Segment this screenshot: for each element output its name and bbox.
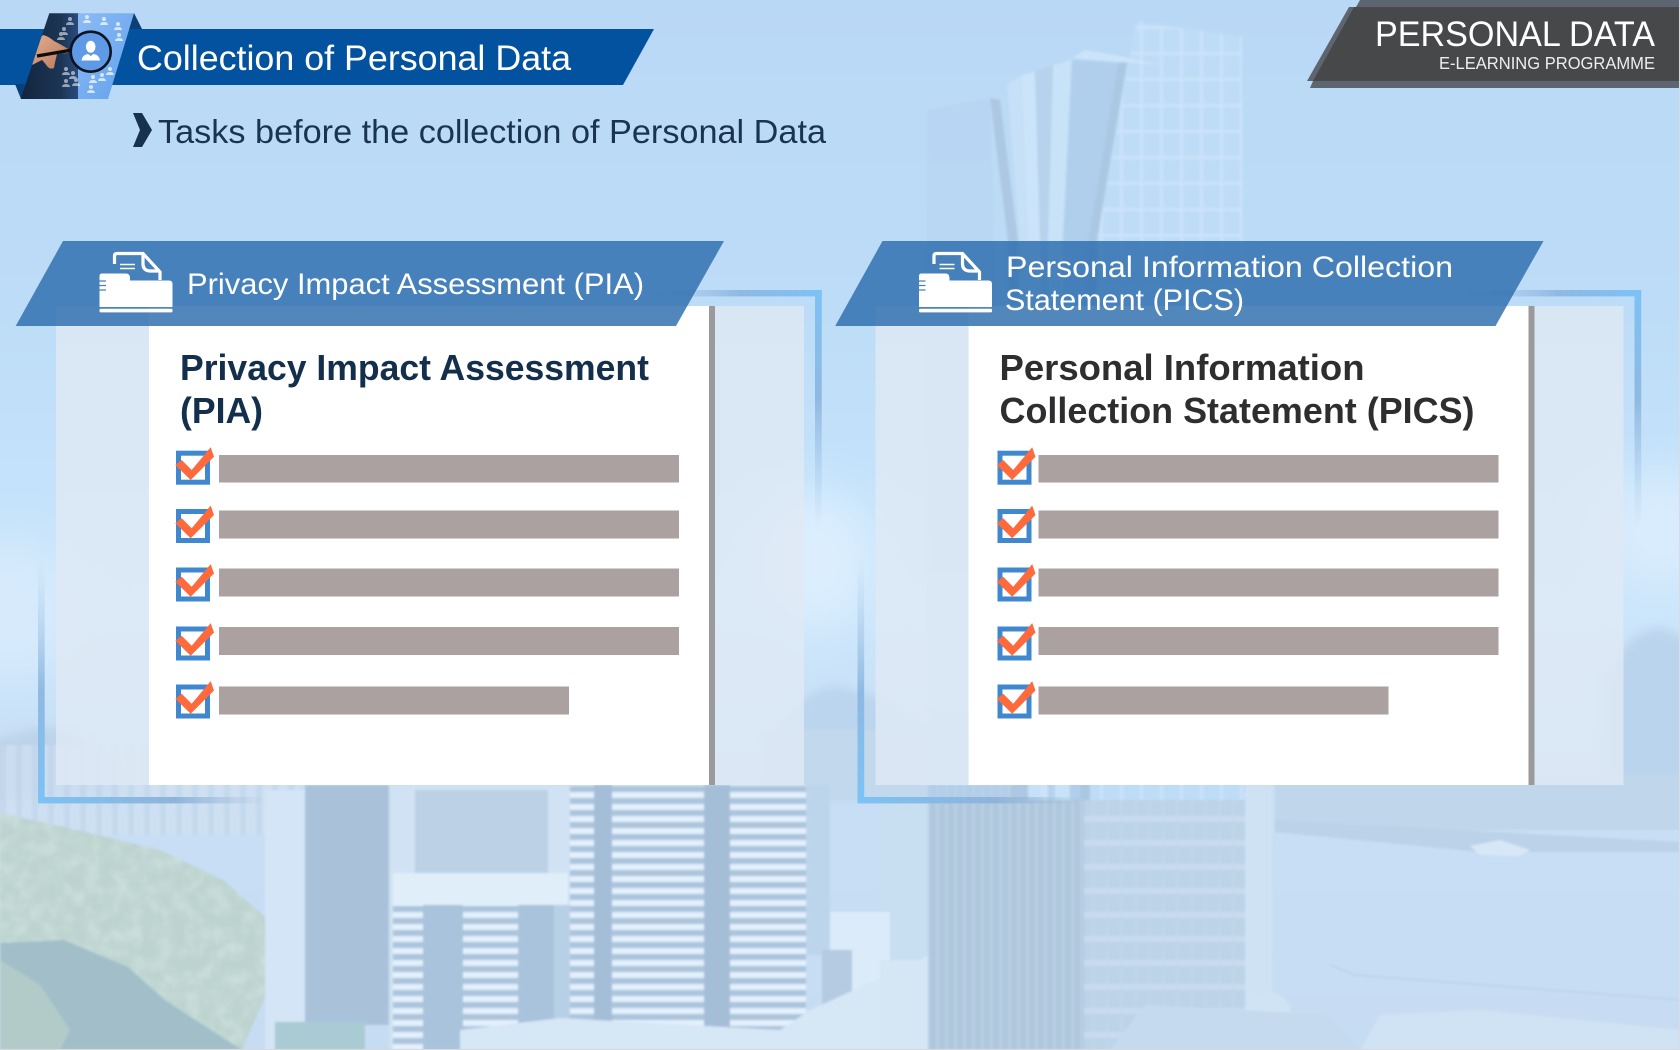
- icon: magnifying glass over people: [15, 10, 142, 102]
- checklist: [997, 447, 1498, 716]
- icon: chevron bullet: [133, 113, 152, 147]
- icon: folder with document: [919, 254, 992, 312]
- badge subtitle: E-LEARNING PROGRAMME: [1439, 53, 1655, 73]
- card heading: Collection Statement (PICS): [1000, 390, 1474, 431]
- header badge: personal data e-learning programme: [1307, 0, 1680, 88]
- checklist: [175, 447, 679, 716]
- banner: PIA: [16, 241, 724, 326]
- banner label: Privacy Impact Assessment (PIA): [187, 268, 644, 301]
- subtitle text: Tasks before the collection of Personal Data: [158, 113, 827, 150]
- card heading: Privacy Impact Assessment: [180, 347, 649, 388]
- panel: privacy impact assessment: [16, 241, 822, 803]
- banner: PICS: [835, 241, 1544, 326]
- title text: Collection of Personal Data: [137, 39, 572, 78]
- white card: [968, 306, 1534, 785]
- banner label: [1005, 251, 1453, 317]
- subtitle with chevron: [133, 113, 827, 150]
- card heading: [180, 347, 649, 431]
- card heading: Personal Information: [1000, 347, 1364, 388]
- badge title: PERSONAL DATA: [1375, 15, 1656, 54]
- banner label: Personal Information Collection: [1006, 251, 1453, 284]
- title banner: [0, 29, 654, 85]
- card heading: (PIA): [180, 390, 263, 431]
- card heading: [1000, 347, 1474, 431]
- white card: [149, 306, 715, 785]
- icon: folder with document: [100, 254, 172, 312]
- banner label: Statement (PICS): [1005, 284, 1244, 317]
- panel: personal information collection statement: [835, 241, 1641, 803]
